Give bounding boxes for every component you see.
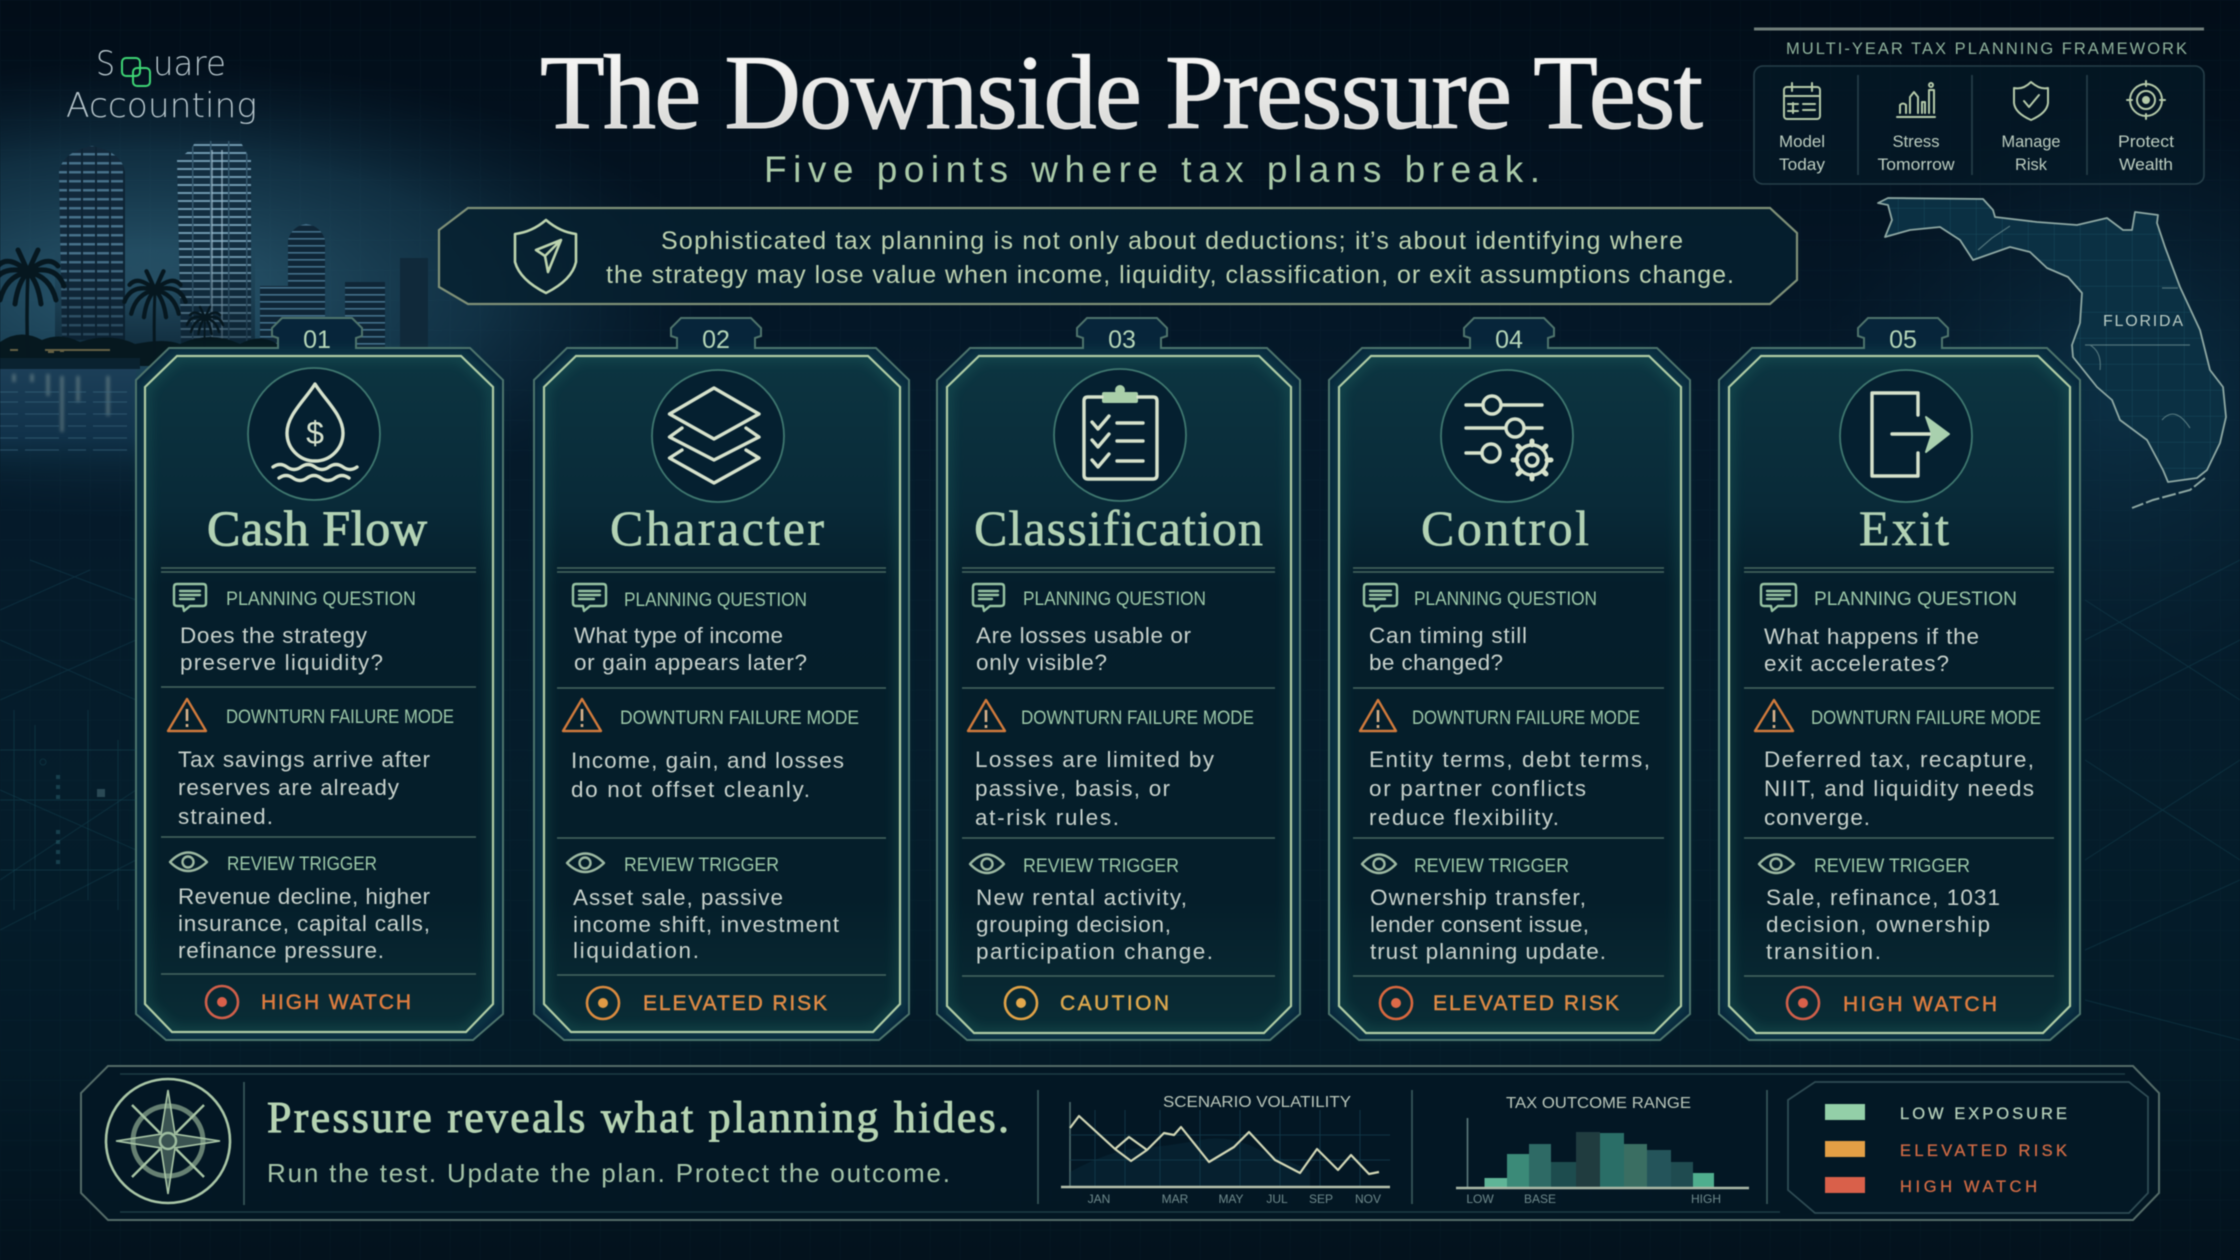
downturn failure mode: DOWNTURN FAILURE MODE: [620, 708, 859, 729]
review trigger: [170, 852, 430, 963]
review trigger: insurance, capital calls,: [178, 911, 430, 936]
HUD detail left: [0, 710, 136, 920]
icon: calendar model: [1784, 83, 1820, 119]
card frame: [136, 318, 503, 1040]
heading: Cash Flow: [207, 500, 427, 556]
downturn failure mode: [968, 700, 1254, 830]
histogram: tax outcome range: [1456, 1095, 1749, 1206]
panel: multi-year tax planning framework: [1754, 29, 2204, 184]
planning question: What type of income: [574, 623, 783, 648]
number 03: 03: [1108, 326, 1136, 354]
footer subline: Run the test. Update the plan. Protect the outcome.: [267, 1158, 950, 1188]
review trigger: Asset sale, passive: [573, 885, 783, 910]
review trigger: Sale, refinance, 1031: [1766, 885, 2000, 910]
review trigger: REVIEW TRIGGER: [1023, 856, 1179, 877]
logo: Square Accounting: Accounting: [66, 86, 257, 126]
planning question: or gain appears later?: [574, 650, 807, 675]
downturn failure mode: reserves are already: [178, 775, 400, 800]
panel: 01 Cash Flow: [136, 318, 503, 1040]
label: stress tomorrow: Tomorrow: [1878, 155, 1955, 174]
review trigger: trust planning update.: [1370, 939, 1606, 964]
icon: cash flow drop: $: [306, 415, 324, 451]
downturn failure mode: or partner conflicts: [1369, 776, 1586, 801]
tower three: [288, 224, 325, 322]
panel: 05 Exit: [1719, 318, 2080, 1040]
label: protect wealth: [2118, 132, 2174, 174]
downturn failure mode: NIIT, and liquidity needs: [1764, 776, 2034, 801]
downturn failure mode: [1755, 700, 2041, 830]
line chart: scenario volatility: [1061, 1094, 1390, 1206]
histogram: tax outcome range: HIGH: [1691, 1192, 1721, 1206]
tower two highlights: [212, 150, 222, 340]
number 05: 05: [1889, 326, 1917, 354]
legend: ELEVATED RISK: [1900, 1142, 2067, 1160]
downturn failure mode: Entity terms, debt terms,: [1369, 747, 1650, 772]
icon: warning: [968, 700, 1005, 731]
review trigger: REVIEW TRIGGER: [1814, 856, 1970, 877]
icon: cash flow drop: [248, 368, 380, 500]
heading: Control: [1421, 500, 1589, 556]
planning question: PLANNING QUESTION: [1023, 589, 1206, 610]
heading: Character: [610, 500, 824, 556]
planning question: PLANNING QUESTION: [1814, 589, 2017, 610]
downturn failure mode: do not offset cleanly.: [571, 777, 810, 802]
framework heading: MULTI-YEAR TAX PLANNING FRAMEWORK: [1786, 40, 2187, 58]
histogram: tax outcome range: LOW: [1466, 1192, 1494, 1206]
planning question: What happens if the: [1764, 624, 1979, 649]
icon: warning: [1755, 700, 1793, 731]
review trigger: REVIEW TRIGGER: [1414, 856, 1569, 877]
downturn failure mode: DOWNTURN FAILURE MODE: [1412, 708, 1640, 729]
downturn failure mode: [168, 699, 454, 829]
status: elevated risk: ELEVATED RISK: [1433, 992, 1619, 1015]
planning question: be changed?: [1369, 650, 1503, 675]
planning question: exit accelerates?: [1764, 651, 1949, 676]
logo mark: linked squares: [122, 58, 150, 86]
label: manage risk: Manage: [2002, 132, 2060, 151]
label: manage risk: [2002, 132, 2060, 174]
legend: [1788, 1082, 2148, 1213]
label: model today: Today: [1779, 155, 1825, 174]
line chart: scenario volatility: SEP: [1309, 1192, 1333, 1206]
legend: HIGH WATCH: [1900, 1178, 2037, 1196]
histogram: tax outcome range: BASE: [1524, 1192, 1556, 1206]
panel: 02 Character: [534, 318, 909, 1040]
icon: eye: [1759, 854, 1794, 873]
logo: Square Accounting: uare: [153, 44, 226, 84]
review trigger: liquidation.: [573, 938, 699, 963]
review trigger: decision, ownership: [1766, 912, 1990, 937]
status: caution: CAUTION: [1060, 992, 1169, 1015]
planning question: [973, 584, 1206, 675]
planning question: [1761, 584, 2017, 676]
reflections: [14, 374, 108, 432]
icon: warning: [563, 699, 601, 731]
icon: warning: [168, 699, 206, 731]
label: protect wealth: Protect: [2118, 132, 2174, 151]
callout text: the strategy may lose value when income, liquidity, classification, or exit assumptions change.: [606, 261, 1734, 289]
downturn failure mode: Deferred tax, recapture,: [1764, 747, 2034, 772]
scene: Florida skyline and waterfront: [0, 141, 440, 481]
palm middle: [124, 271, 186, 366]
callout text: [606, 227, 1734, 289]
downturn failure mode: reduce flexibility.: [1369, 805, 1559, 830]
status: high watch: HIGH WATCH: [261, 991, 411, 1014]
title: The Downside Pressure Test: [540, 34, 1703, 151]
icon: eye: [1362, 854, 1396, 873]
planning question: only visible?: [976, 650, 1107, 675]
icon: compass: [106, 1079, 230, 1203]
number 04: 04: [1495, 326, 1523, 354]
icon: layers: [652, 370, 784, 502]
icon: warning: [1360, 700, 1396, 731]
downturn failure mode: DOWNTURN FAILURE MODE: [1021, 708, 1254, 729]
heading: Classification: [974, 500, 1263, 556]
downturn failure mode: DOWNTURN FAILURE MODE: [1811, 708, 2041, 729]
review trigger: participation change.: [976, 939, 1213, 964]
keys: [2132, 478, 2205, 508]
icon: chat: [573, 584, 606, 611]
downturn failure mode: converge.: [1764, 805, 1870, 830]
icon: stress chart: [1897, 83, 1935, 117]
status: elevated risk: [1380, 987, 1619, 1019]
status: high watch: [206, 986, 411, 1018]
palm right: [187, 307, 223, 363]
tower one: [59, 146, 125, 340]
status: caution: [1005, 987, 1169, 1019]
planning question: PLANNING QUESTION: [226, 589, 416, 610]
icon: target: [2127, 81, 2165, 119]
icon: clipboard: [1054, 369, 1186, 501]
line chart: scenario volatility: JAN: [1088, 1192, 1110, 1206]
planning question: Does the strategy: [180, 623, 368, 648]
review trigger: New rental activity,: [976, 885, 1187, 910]
line chart: scenario volatility: MAY: [1218, 1192, 1244, 1206]
line chart: scenario volatility: MAR: [1162, 1192, 1189, 1206]
downturn failure mode: passive, basis, or: [975, 776, 1170, 801]
icon: chat: [174, 584, 206, 611]
tower two: [177, 141, 251, 345]
line chart: scenario volatility: JUL: [1266, 1192, 1288, 1206]
downturn failure mode: Income, gain, and losses: [571, 748, 844, 773]
planning question: PLANNING QUESTION: [624, 590, 807, 611]
legend: LOW EXPOSURE: [1900, 1105, 2067, 1123]
callout: sophisticated tax planning statement: [439, 208, 1797, 304]
card frame: [1719, 318, 2080, 1040]
line chart: scenario volatility: SCENARIO VOLATILITY: [1163, 1094, 1351, 1111]
review trigger: REVIEW TRIGGER: [227, 854, 377, 875]
icon: shield arrow: [515, 220, 576, 293]
review trigger: lender consent issue,: [1370, 912, 1589, 937]
map detail: [1978, 226, 2190, 428]
histogram: tax outcome range: TAX OUTCOME RANGE: [1506, 1095, 1691, 1112]
tower small left of third: [260, 286, 288, 348]
subtitle: Five points where tax plans break.: [764, 149, 1540, 190]
icon: eye: [970, 854, 1004, 873]
downturn failure mode: Losses are limited by: [975, 747, 1215, 772]
planning question: [174, 584, 416, 675]
card frame: [1329, 318, 1690, 1040]
status: high watch: [1787, 987, 1997, 1019]
tower shading: [55, 250, 255, 345]
callout text: Sophisticated tax planning is not only about deductions; it’s about identifying where: [661, 227, 1683, 255]
label: model today: Model: [1779, 132, 1825, 151]
tower far right: [400, 258, 428, 348]
footer panel: [81, 1066, 2159, 1220]
review trigger: income shift, investment: [573, 912, 840, 937]
icon: chat: [1364, 584, 1397, 611]
review trigger: [1362, 854, 1606, 964]
footer headline: Pressure reveals what planning hides.: [267, 1093, 1009, 1142]
pavilion lights: [10, 350, 110, 352]
icon: chat: [1761, 584, 1796, 611]
planning question: PLANNING QUESTION: [1414, 589, 1597, 610]
line chart: scenario volatility: NOV: [1355, 1192, 1381, 1206]
card frame: [937, 318, 1300, 1040]
label: protect wealth: Wealth: [2119, 155, 2173, 174]
downturn failure mode: DOWNTURN FAILURE MODE: [226, 707, 454, 728]
review trigger: [567, 854, 840, 963]
icon: eye: [567, 854, 604, 872]
planning question: [573, 584, 807, 675]
label: stress tomorrow: Stress: [1892, 132, 1940, 151]
review trigger: [1759, 854, 2000, 964]
water: [0, 369, 136, 481]
number 01: 01: [303, 326, 331, 354]
label: stress tomorrow: [1878, 132, 1955, 174]
review trigger: grouping decision,: [976, 912, 1171, 937]
Florida label: FLORIDA: [2103, 313, 2183, 330]
planning question: [1364, 584, 1597, 675]
tree line: [0, 334, 440, 366]
review trigger: [970, 854, 1213, 964]
review trigger: Ownership transfer,: [1370, 885, 1586, 910]
downturn failure mode: Tax savings arrive after: [178, 747, 430, 772]
downturn failure mode: at-risk rules.: [975, 805, 1119, 830]
shore: [0, 358, 140, 369]
Florida map: [1878, 198, 2226, 508]
palm left: [0, 250, 64, 362]
label: model today: [1779, 132, 1825, 174]
logo: Square Accounting: [66, 44, 257, 126]
icon: eye: [170, 852, 207, 871]
status: high watch: HIGH WATCH: [1843, 993, 1997, 1016]
heading: Exit: [1859, 500, 1949, 556]
logo: Square Accounting: S: [96, 44, 115, 84]
card frame: [534, 318, 909, 1040]
tower small mid right: [345, 282, 385, 352]
icon: exit door: [1840, 370, 1972, 502]
status: elevated risk: ELEVATED RISK: [643, 992, 827, 1015]
icon: sliders and gear: [1441, 370, 1573, 502]
planning question: preserve liquidity?: [180, 650, 383, 675]
downturn failure mode: strained.: [178, 804, 273, 829]
icon: chat: [973, 584, 1004, 611]
downturn failure mode: [1360, 700, 1650, 830]
label: manage risk: Risk: [2015, 155, 2047, 174]
review trigger: REVIEW TRIGGER: [624, 855, 779, 876]
review trigger: refinance pressure.: [178, 938, 384, 963]
review trigger: transition.: [1766, 939, 1881, 964]
planning question: Are losses usable or: [976, 623, 1192, 648]
planning question: Can timing still: [1369, 623, 1527, 648]
icon: shield check: [2014, 82, 2048, 120]
panel: 03 Classification: [937, 318, 1300, 1040]
panel: 04 Control: [1329, 318, 1690, 1040]
review trigger: Revenue decline, higher: [178, 884, 430, 909]
state shape: [1878, 198, 2226, 482]
downturn failure mode: [563, 699, 859, 802]
status: elevated risk: [587, 987, 827, 1019]
number 02: 02: [702, 326, 730, 354]
